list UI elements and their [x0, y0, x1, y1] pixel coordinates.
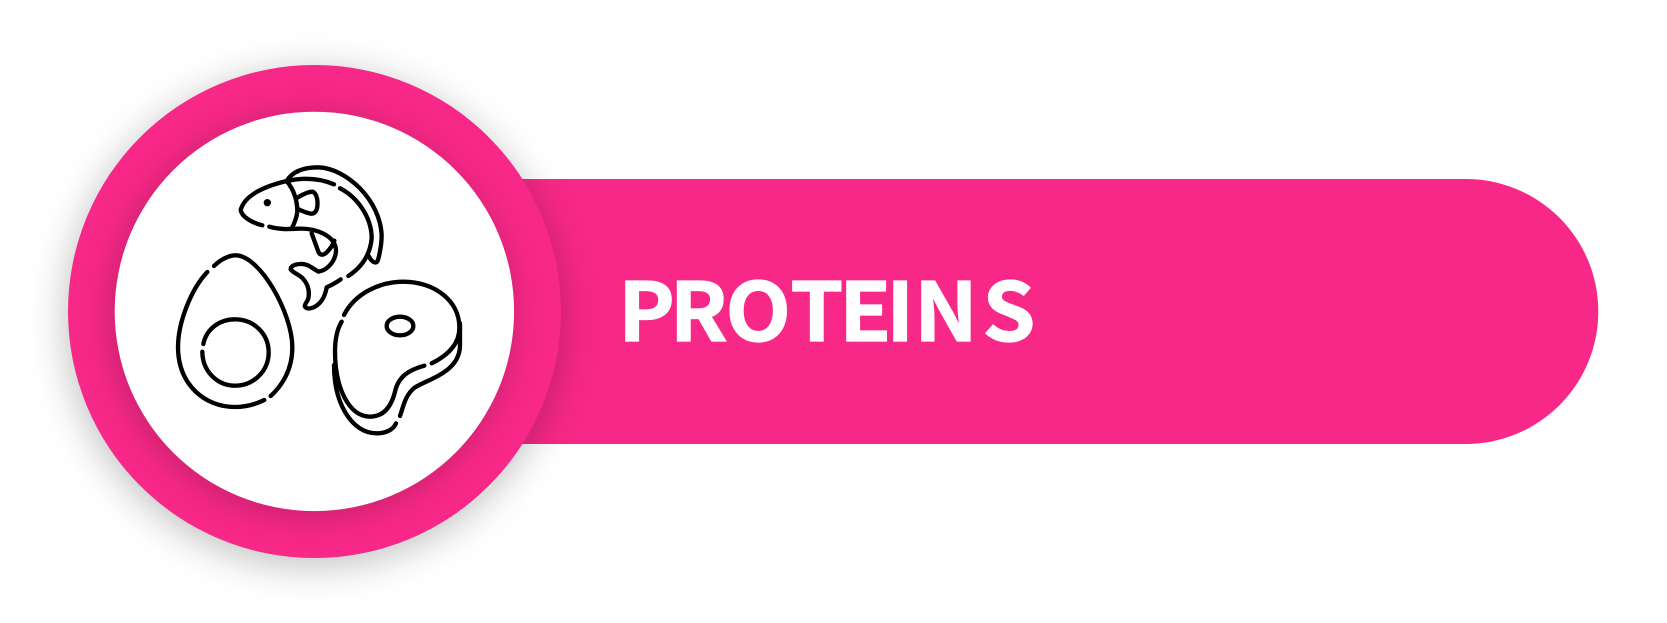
badge pink ring: [68, 65, 561, 558]
icon: halved egg: [178, 255, 292, 407]
infographic banner: [46, 52, 1598, 586]
icon: steak: [334, 282, 460, 433]
shadow behind badge: [66, 72, 560, 566]
circular badge: [68, 65, 561, 558]
icon: fish: [241, 167, 382, 308]
ring inner shadow: [111, 116, 511, 516]
heading: proteins: PROTEINS: [618, 247, 1035, 364]
pink label bar: [400, 179, 1598, 444]
badge white centre: [115, 112, 514, 511]
